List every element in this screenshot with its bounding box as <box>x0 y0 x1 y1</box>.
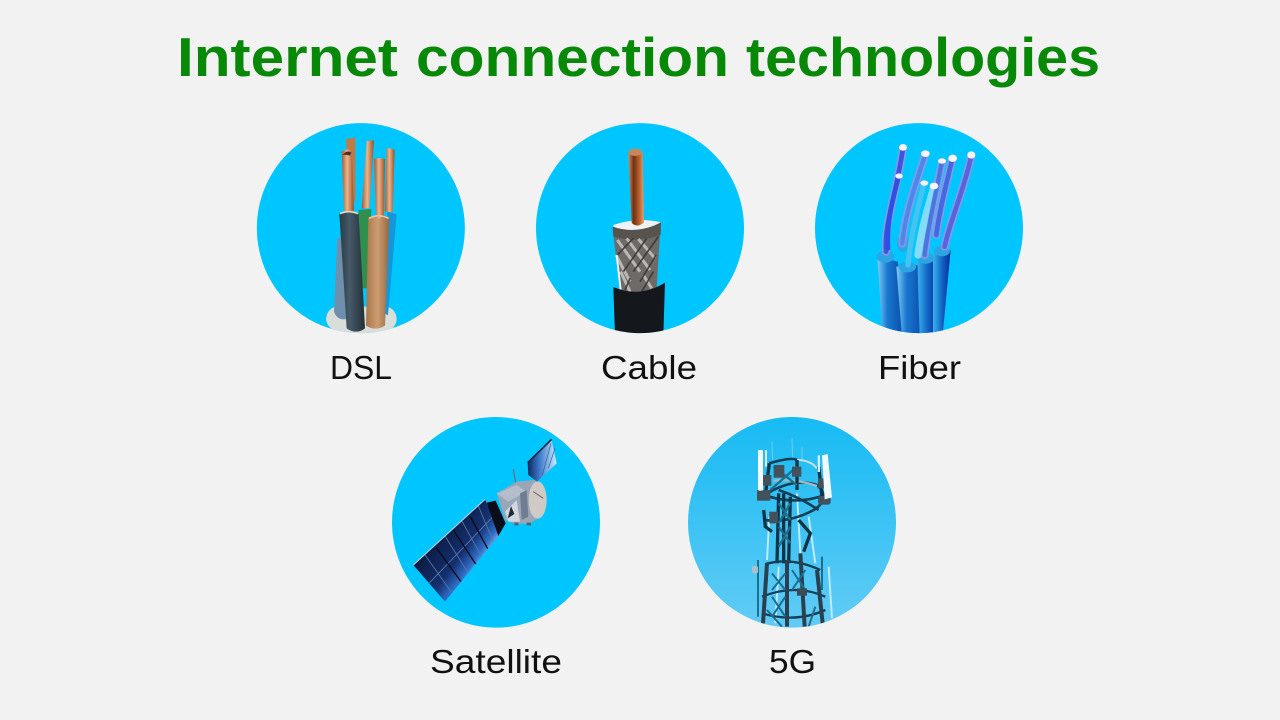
item: 5G <box>688 417 896 681</box>
label: Fiber: Fiber <box>878 350 961 387</box>
icon: DSL copper wires <box>257 123 465 336</box>
item: Satellite <box>392 417 600 681</box>
label: DSL: DSL <box>330 350 392 387</box>
item: Fiber <box>815 123 1023 387</box>
antennas <box>758 450 763 491</box>
icon: 5G cell tower <box>688 417 896 628</box>
icon: satellite <box>392 417 600 628</box>
title: Internet <box>177 26 398 88</box>
item: Cable <box>536 123 744 387</box>
title: connection <box>416 26 729 88</box>
label: 5G: 5G <box>769 644 816 681</box>
label: Cable: Cable <box>601 350 697 387</box>
icon: fiber optic strands <box>815 123 1023 337</box>
item: DSL <box>257 123 465 387</box>
title: technologies <box>746 26 1100 88</box>
icon: coaxial cable <box>536 123 744 335</box>
title <box>177 26 1100 88</box>
label: Satellite: Satellite <box>430 644 562 681</box>
